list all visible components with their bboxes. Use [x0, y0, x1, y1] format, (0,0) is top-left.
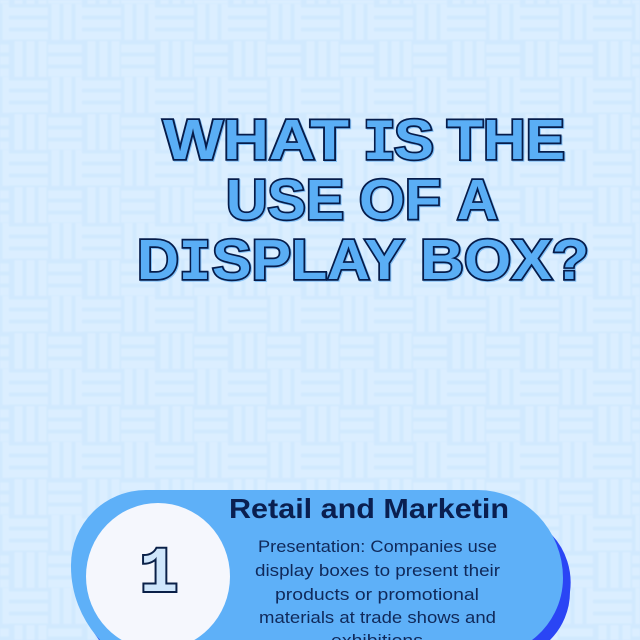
title: OF — [359, 168, 441, 232]
card body — [71, 490, 563, 640]
card heading: Retail and Marketin — [229, 493, 509, 524]
title: BOX? — [420, 228, 589, 292]
title — [137, 108, 589, 297]
card body text: materials at trade shows and — [259, 608, 496, 627]
title: S — [394, 108, 434, 172]
card shadow — [88, 535, 571, 640]
title: WHAT — [163, 108, 349, 172]
card body text: display boxes to present their — [255, 561, 500, 580]
title: I — [179, 232, 211, 297]
card body text: Presentation: Companies use — [258, 537, 497, 556]
card body text — [255, 537, 500, 640]
card body text: products or promotional — [275, 585, 479, 604]
panel: retail and marketing card — [71, 490, 571, 640]
title: USE — [226, 168, 344, 232]
title: D — [137, 228, 179, 292]
title: SPLAY — [212, 228, 404, 292]
number badge — [86, 503, 230, 640]
title: I — [363, 112, 396, 177]
title: THE — [447, 108, 565, 172]
title: A — [457, 168, 498, 232]
number badge: 1 — [140, 539, 178, 611]
